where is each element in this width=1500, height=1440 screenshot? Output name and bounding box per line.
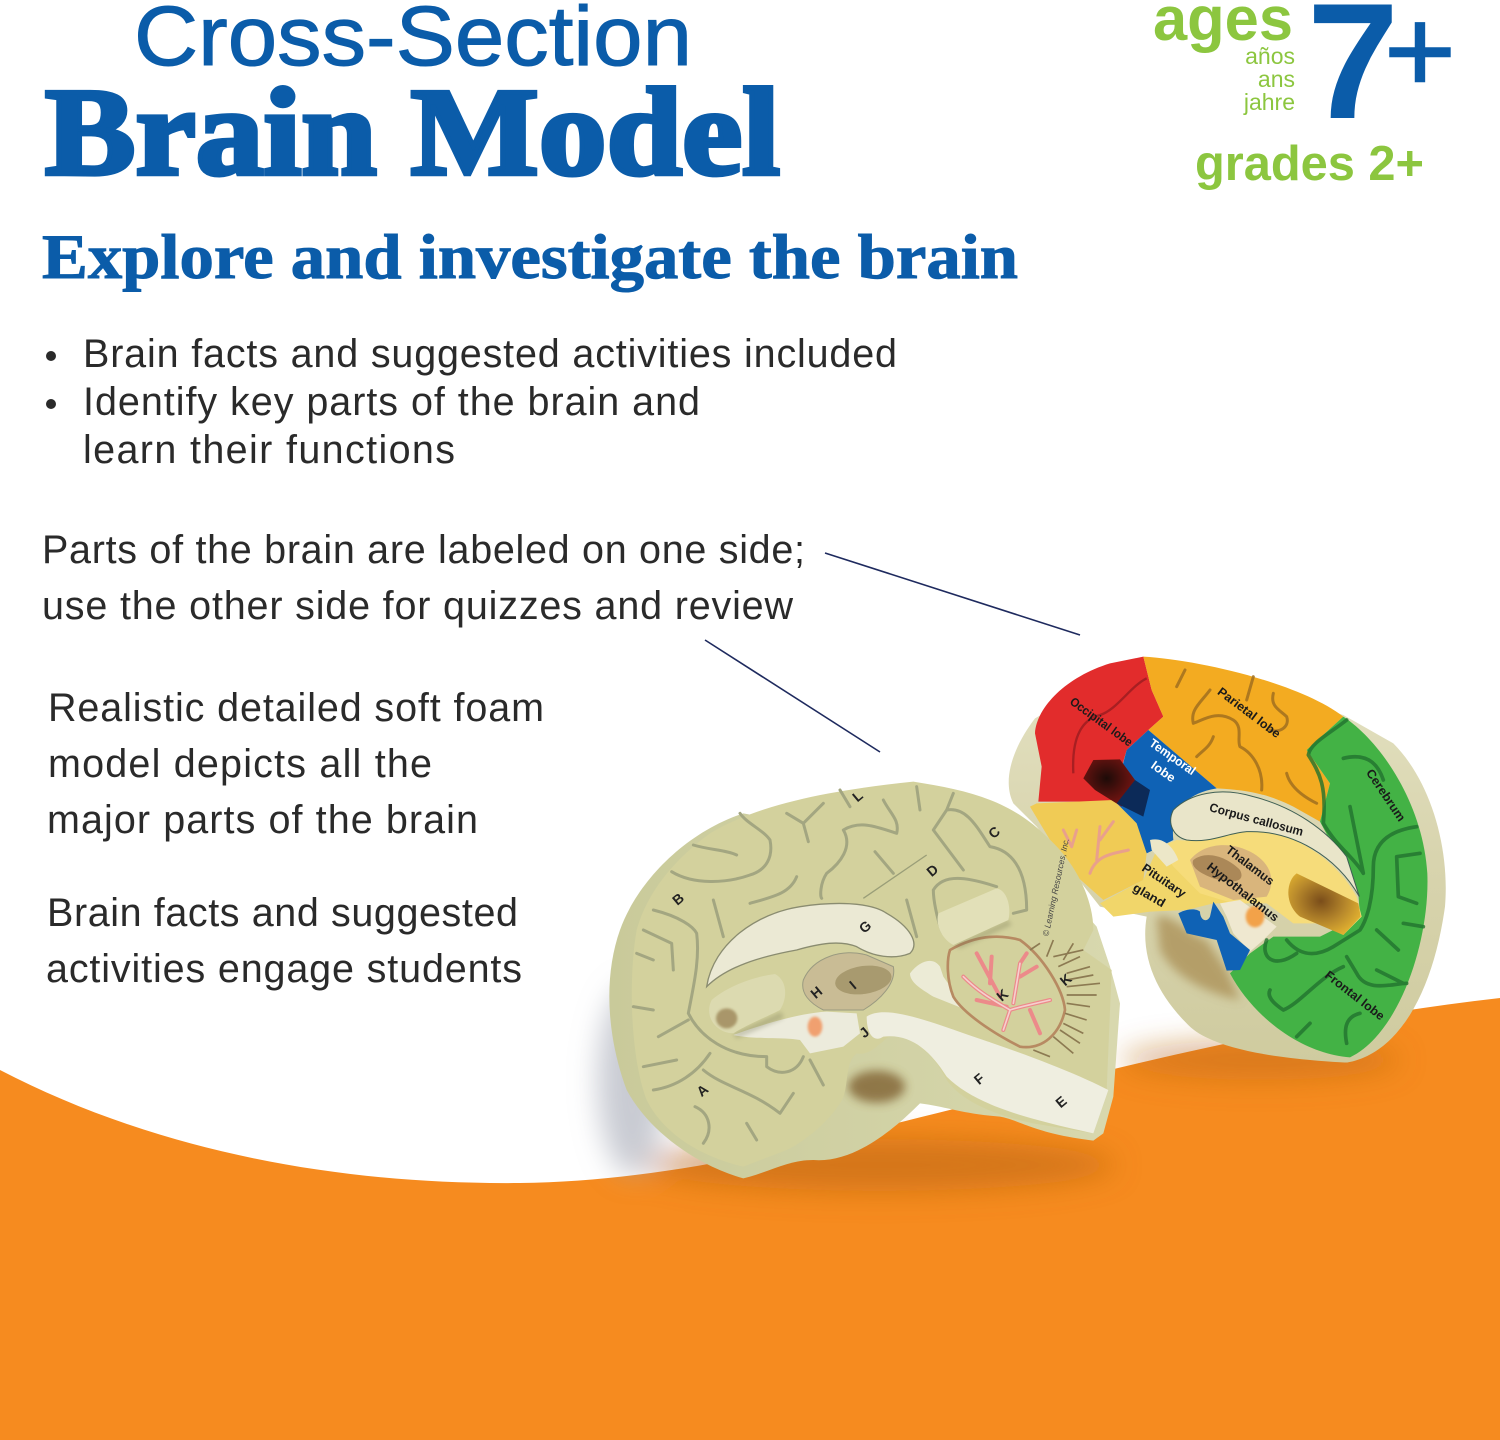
text: quiz letters: B: [669, 890, 687, 908]
hypothalamus: [1193, 855, 1242, 881]
text: lobe labels: Pituitary: [1139, 861, 1189, 901]
hypothalamus: [833, 962, 893, 998]
white band: [867, 1012, 1108, 1133]
corpus callosum: [707, 903, 914, 987]
white stem: [733, 1012, 860, 1053]
orange spot: [1246, 906, 1264, 927]
age badge: jahre: [1243, 89, 1295, 115]
yellow brainstem: [1100, 843, 1233, 917]
text: quiz letters: D: [923, 861, 941, 880]
callout: labeled sides: [42, 528, 805, 628]
callout: labeled sides: Parts of the brain are labeled on one side;: [42, 528, 805, 572]
text: quiz letters: A: [693, 1081, 711, 1100]
callout: engage students: [46, 891, 522, 991]
right peg shadow: [953, 920, 1012, 948]
title: [45, 0, 780, 202]
text: lobe labels: Temporal: [1147, 736, 1198, 778]
callout: engage students: Brain facts and suggested: [47, 891, 518, 935]
green frontal lobe: [1230, 717, 1427, 1057]
sulci: frontal: [1265, 720, 1423, 1043]
arrow: leader line to labeled side: [825, 553, 1080, 635]
cerebellum outline: [948, 937, 1065, 1047]
inner yellow: [1160, 832, 1362, 935]
sulci: occipital: [1073, 678, 1147, 773]
hollow dark spot: [848, 1071, 905, 1103]
text: lobe labels: Parietal lobe: [1215, 685, 1283, 741]
text: lobe labels: Frontal lobe: [1322, 968, 1387, 1023]
text: lobe labels: Cerebrum: [1363, 767, 1408, 824]
thalamus: [803, 953, 894, 1010]
thalamus: [1190, 845, 1271, 900]
callout: labeled sides: use the other side for quizzes and review: [42, 584, 793, 628]
cerebellum: [1030, 800, 1147, 900]
corpus callosum: [1171, 792, 1359, 897]
callout: foam model: Realistic detailed soft foam: [48, 686, 544, 730]
text: quiz letters: © Learning Resources, Inc.: [1041, 837, 1071, 937]
brain shadow: [598, 985, 1400, 1191]
left peg: [709, 974, 785, 1033]
text: lobe labels: gland: [1130, 880, 1168, 910]
sulci: parietal: [1177, 670, 1317, 803]
orange wave background: [0, 998, 1500, 1440]
left brain half: quiz side: [609, 782, 1120, 1178]
red occipital lobe: [1035, 657, 1163, 802]
callout: foam model: model depicts all the: [48, 742, 432, 786]
age badge: [1153, 0, 1456, 191]
text: quiz letters: G: [856, 917, 874, 936]
text: quiz letters: E: [1052, 1093, 1070, 1111]
brain body: [1009, 657, 1446, 1063]
occipital hole: [1083, 759, 1135, 807]
text: lobe labels: Hypothalamus: [1204, 860, 1282, 925]
age badge: años: [1245, 43, 1295, 69]
orange spot: [808, 1017, 822, 1037]
face: [632, 782, 1112, 1167]
arrow: leader line to quiz side: [705, 640, 880, 752]
callout: foam model: [47, 686, 544, 842]
text: quiz letters: K: [993, 986, 1011, 1004]
callout: foam model: major parts of the brain: [47, 798, 478, 842]
text: lobe labels: Occipital lobe: [1067, 694, 1135, 749]
pituitary area: [1150, 839, 1178, 867]
peg: [1288, 873, 1361, 935]
blue temporal lobe: [1113, 730, 1217, 853]
text: lobe labels: [1067, 685, 1408, 1023]
bullet list: [46, 332, 897, 472]
blue lower: [1178, 902, 1250, 971]
text: quiz letters: H: [807, 983, 825, 1002]
text: quiz letters: J: [856, 1024, 872, 1041]
subtitle: Explore and investigate the brain: [42, 221, 1018, 292]
temporal hole: [1117, 780, 1150, 817]
cream lower: [1220, 900, 1277, 952]
right brain half: labeled colored: [1009, 657, 1446, 1063]
text: quiz letters: F: [971, 1070, 988, 1088]
orange parietal lobe: [1143, 657, 1343, 822]
text: quiz letters: C: [985, 823, 1003, 842]
title: Brain Model: [45, 64, 780, 202]
age badge: ans: [1258, 66, 1295, 92]
text: quiz letters: L: [849, 787, 866, 805]
bullet list: Brain facts and suggested activities included: [83, 332, 897, 376]
text: quiz letters: I: [846, 978, 859, 992]
callout: engage students: activities engage students: [46, 947, 522, 991]
left peg shadow: [733, 1012, 783, 1038]
text: quiz letters: K: [1057, 970, 1075, 989]
text: lobe labels: lobe: [1148, 758, 1178, 785]
sulci: [633, 787, 1027, 1143]
hollow shade: [1157, 916, 1240, 1000]
bullet list: learn their functions: [83, 428, 455, 472]
cerebellum veins: [1063, 822, 1128, 873]
age badge: grades 2+: [1195, 137, 1424, 191]
bullet list: Identify key parts of the brain and: [83, 380, 700, 424]
text: lobe labels: Corpus callosum: [1208, 800, 1305, 839]
cerebellum veins: [963, 953, 1050, 1033]
right peg: [938, 888, 1009, 945]
cerebellum fringe: [1030, 940, 1100, 1057]
brain body: [609, 813, 1120, 1178]
text: lobe labels: Thalamus: [1223, 843, 1277, 888]
text: quiz letters: [669, 787, 1075, 1111]
